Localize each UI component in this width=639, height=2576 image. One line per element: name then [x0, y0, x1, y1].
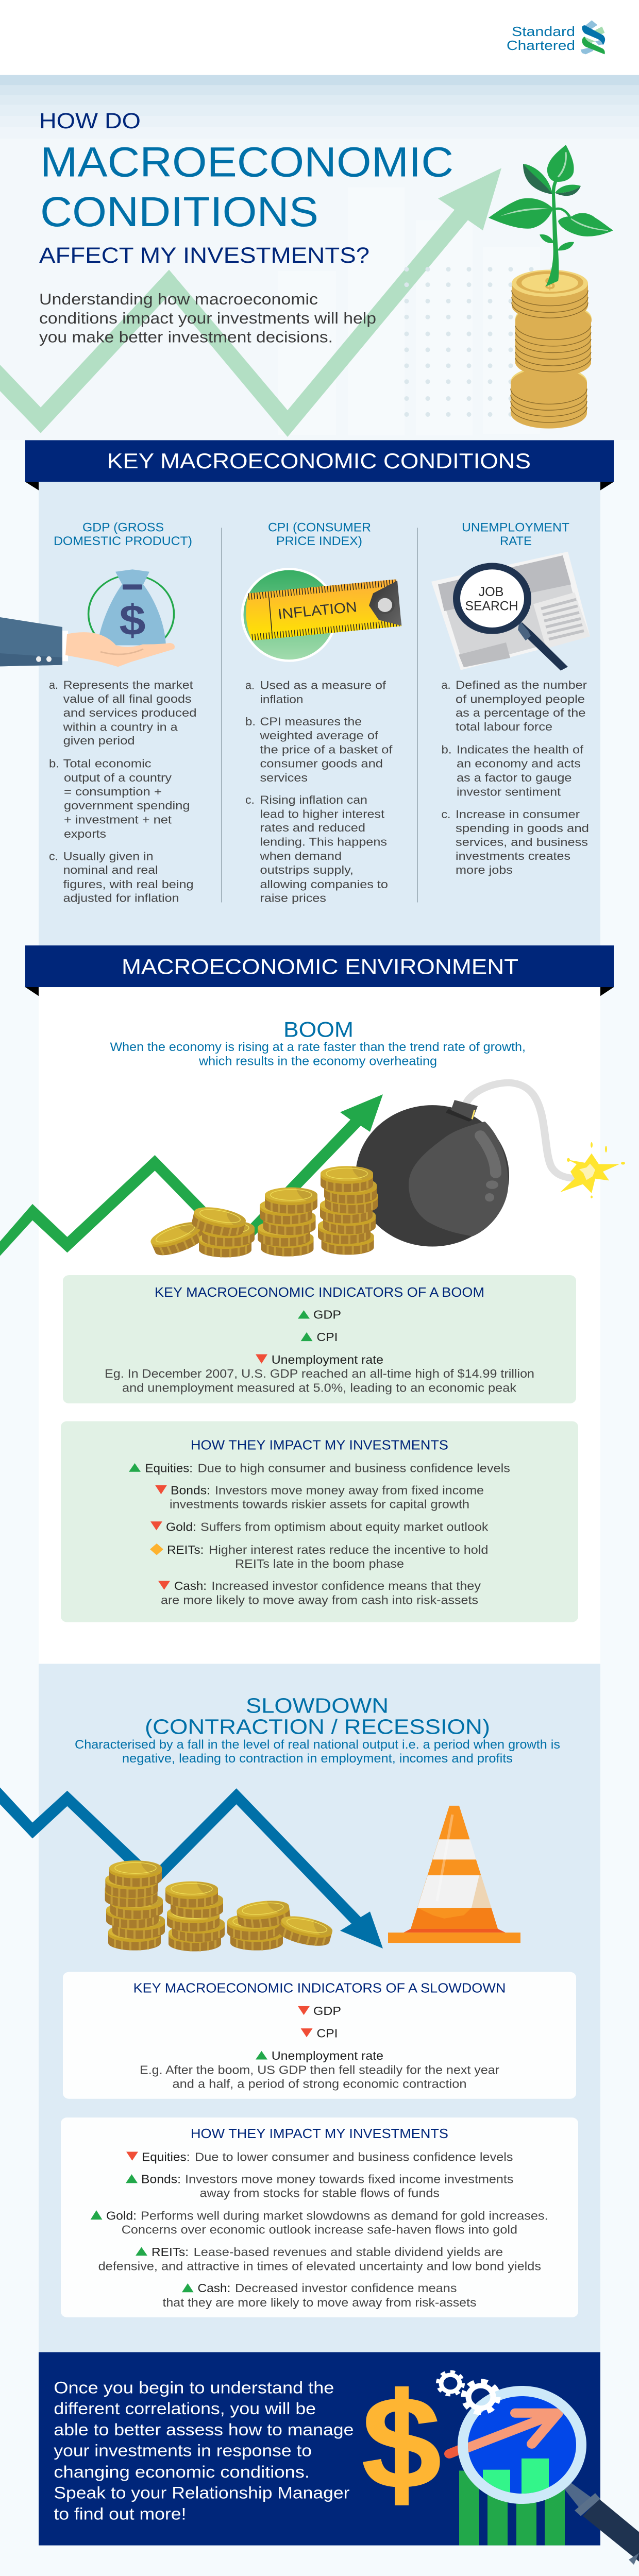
list: GDP points: Usually given in — [63, 850, 154, 862]
logo: Standard Chartered — [507, 20, 605, 54]
item: bonds: Bonds: — [141, 2173, 181, 2186]
item: cash: Increased investor confidence means that they — [211, 1580, 481, 1593]
icon: money bag in hand — [0, 569, 175, 667]
list: GDP points: government spending — [64, 799, 190, 812]
heading: GDP: DOMESTIC PRODUCT) — [54, 535, 192, 548]
heading: slowdown: (CONTRACTION / RECESSION) — [145, 1716, 490, 1739]
indicator: unemployment up: Unemployment rate — [272, 2049, 383, 2063]
text: boom description: When the economy is rising at a rate faster than the trend rate of growth, — [110, 1041, 526, 1054]
intro paragraph: Understanding how macroeconomic — [39, 290, 318, 308]
sprout leaves — [489, 145, 613, 250]
text: closing message: able to better assess how to manage — [54, 2420, 354, 2439]
title: CONDITIONS — [40, 189, 318, 235]
text: closing message: different correlations, you will be — [54, 2399, 316, 2418]
icon: job search magnifier on newspaper: SEARCH — [465, 599, 518, 613]
icon: inflation tape measure — [242, 569, 401, 660]
indicator: GDP down — [298, 2005, 341, 2018]
text: slowdown description: Characterised by a fall in the level of real national output i.e. a period when growth is — [75, 1738, 560, 1752]
list: CPI points: inflation — [260, 693, 304, 706]
text: boom example: and unemployment measured at 5.0%, leading to an economic peak — [122, 1381, 516, 1395]
logo wordmark: Standard — [512, 24, 575, 39]
list: unemployment points: spending in goods and — [456, 822, 589, 835]
list: GDP points: figures, with real being — [63, 878, 194, 891]
list: unemployment points: total labour force — [456, 720, 552, 733]
list: CPI points: lead to higher interest — [260, 807, 385, 820]
panel: how boom impacts investments — [61, 1421, 578, 1622]
text: boom description: which results in the economy overheating — [198, 1055, 437, 1068]
item: bonds: away from stocks for stable flows of funds — [200, 2187, 440, 2200]
lens chart — [468, 2408, 563, 2494]
item: bonds: Investors move money towards fixed income investments — [185, 2173, 514, 2186]
title: HOW DO — [39, 108, 141, 133]
list: unemployment points: c. — [441, 808, 451, 821]
heading: boom: BOOM — [283, 1018, 354, 1042]
item: REITs — [150, 1544, 488, 1571]
heading: GDP: GDP (GROSS — [82, 521, 164, 534]
arrow: red trend — [449, 2410, 558, 2454]
item: cash — [158, 1580, 481, 1607]
panel: how slowdown impacts investments — [61, 2117, 578, 2317]
arrow: blue slowdown chart line — [0, 1787, 383, 1948]
item: equities: Due to high consumer and business confidence levels — [198, 1462, 510, 1475]
text: slowdown example: E.g. After the boom, US GDP then fell steadily for the next year — [140, 2063, 499, 2077]
list: CPI points: b. — [245, 715, 256, 728]
list: GDP points: + investment + net — [64, 814, 172, 826]
panel: slowdown background — [39, 1664, 600, 2352]
panel: key macroeconomic conditions — [39, 482, 600, 945]
list: CPI points: rates and reduced — [260, 821, 365, 834]
text: closing message: to find out more! — [54, 2505, 186, 2523]
list: CPI points — [245, 679, 393, 904]
indicator: GDP up — [298, 1309, 341, 1321]
icon: bomb — [356, 1082, 577, 1247]
icon: inflation tape measure: INFLATION — [277, 599, 358, 622]
item: equities: Equities: — [142, 2151, 190, 2164]
list: GDP points: exports — [64, 827, 106, 840]
item: gold: Concerns over economic outlook increase safe-haven flows into gold — [122, 2224, 517, 2236]
item: bonds: investments towards riskier assets for capital growth — [170, 1498, 469, 1511]
item: REITs — [98, 2246, 541, 2273]
upper coin stack — [512, 270, 588, 321]
heading: unemployment rate: RATE — [500, 535, 532, 548]
item: cash: Cash: — [198, 2282, 231, 2295]
icon: spark — [560, 1142, 625, 1198]
text: closing message: changing economic conditions. — [54, 2463, 310, 2482]
indicator: CPI down — [301, 2027, 338, 2040]
column dividers — [222, 528, 417, 902]
item: gold — [91, 2209, 548, 2236]
list: unemployment points: as a factor to gauge — [457, 771, 572, 784]
banner: macroeconomic environment — [25, 945, 614, 996]
list: CPI points: when demand — [259, 850, 342, 862]
intro paragraph — [39, 290, 376, 346]
icon: dollar sign: $ — [361, 2369, 442, 2517]
item: gold: Gold: — [106, 2209, 137, 2223]
header white strip — [0, 0, 639, 75]
arrow: pale green rising zigzag — [0, 168, 501, 437]
heading: CPI: PRICE INDEX) — [276, 535, 362, 548]
list: GDP points: c. — [49, 850, 58, 862]
text: boom example: Eg. In December 2007, U.S. GDP reached an all-time high of $14.99 trillion — [105, 1367, 534, 1381]
item: bonds: Investors move money away from fixed income — [215, 1484, 484, 1497]
heading: slowdown — [145, 1694, 490, 1739]
heading: CPI — [268, 521, 371, 548]
icon: coin stack with sprout — [489, 145, 613, 429]
icon: magnifying glass — [448, 2386, 639, 2565]
column: GDP — [0, 521, 197, 904]
middle coin stack — [515, 303, 592, 377]
heading: CPI: CPI (CONSUMER — [268, 521, 371, 534]
item: gold: Performs well during market slowdowns as demand for gold increases. — [141, 2209, 548, 2223]
list: CPI points: raise prices — [260, 892, 326, 904]
icon: money bag in hand: $ — [119, 596, 146, 645]
lower coin stack — [511, 366, 587, 429]
logo wordmark: Chartered — [507, 38, 575, 53]
item: bonds: Bonds: — [171, 1484, 210, 1497]
list: CPI points: the price of a basket of — [260, 743, 393, 756]
icon: traffic cone — [388, 1806, 520, 1943]
item: cash: are more likely to move away from cash into risk-assets — [161, 1594, 478, 1607]
title — [39, 108, 453, 267]
indicator: unemployment down: Unemployment rate — [272, 1353, 383, 1366]
text: boom description — [110, 1041, 526, 1068]
list: GDP points: given period — [63, 734, 135, 747]
indicator: CPI up — [301, 1331, 338, 1344]
indicator: CPI down: CPI — [316, 2027, 338, 2040]
item: cash — [163, 2282, 477, 2310]
banner: key macroeconomic conditions: KEY MACROECONOMIC CONDITIONS — [107, 449, 531, 473]
list: unemployment points: Defined as the number — [456, 679, 587, 691]
list: unemployment points: more jobs — [456, 863, 513, 876]
heading: indicators: KEY MACROECONOMIC INDICATORS OF A BOOM — [155, 1284, 484, 1300]
text: closing message: Speak to your Relationship Manager — [54, 2484, 349, 2502]
item: REITs: Lease-based revenues and stable dividend yields are — [194, 2246, 503, 2259]
heading: slowdown: SLOWDOWN — [246, 1694, 389, 1718]
icon: gears — [438, 2372, 498, 2412]
item: gold: Suffers from optimism about equity market outlook — [200, 1520, 488, 1534]
list: unemployment points: b. — [441, 743, 451, 756]
text: closing message: Once you begin to understand the — [54, 2379, 334, 2397]
heading: impact: HOW THEY IMPACT MY INVESTMENTS — [191, 1437, 448, 1452]
icon: coin stacks (boom) — [148, 1166, 378, 1260]
heading: slowdown impact: HOW THEY IMPACT MY INVESTMENTS — [191, 2126, 448, 2141]
list: CPI points: Rising inflation can — [260, 793, 367, 806]
item: REITs: defensive, and attractive in times of elevated uncertainty and low bond yields — [98, 2260, 541, 2273]
item: gold: Gold: — [166, 1520, 196, 1534]
list: unemployment points: as a percentage of the — [456, 706, 586, 719]
list: GDP points: adjusted for inflation — [63, 892, 179, 904]
item: REITs: REITs: — [152, 2246, 189, 2259]
heading: slowdown indicators: KEY MACROECONOMIC INDICATORS OF A SLOWDOWN — [133, 1980, 506, 1995]
heading: unemployment rate: UNEMPLOYMENT — [462, 521, 569, 534]
banner: key macroeconomic conditions — [25, 440, 614, 490]
list: GDP points: value of all final goods — [63, 692, 192, 705]
item: REITs: REITs late in the boom phase — [235, 1557, 404, 1571]
icon: coin stacks (slowdown) — [105, 1860, 334, 1951]
text: boom example — [105, 1367, 534, 1395]
list: unemployment points: a. — [441, 679, 451, 691]
column: unemployment rate — [431, 521, 590, 876]
panel: key indicators of a boom — [63, 1275, 576, 1403]
list: GDP points — [49, 679, 197, 904]
list: GDP points: nominal and real — [63, 863, 158, 876]
list: GDP points: a. — [49, 679, 58, 691]
panel: boom background — [39, 987, 600, 1664]
text: slowdown description: negative, leading to contraction in employment, incomes and profits — [122, 1752, 513, 1766]
icon: job search magnifier on newspaper — [431, 552, 590, 671]
text: slowdown description — [75, 1738, 560, 1766]
intro paragraph: conditions impact your investments will help — [39, 309, 376, 327]
title: MACROECONOMIC — [40, 139, 453, 186]
list: unemployment points: investor sentiment — [457, 785, 561, 798]
list: GDP points: Represents the market — [63, 679, 193, 691]
list: CPI points: allowing companies to — [260, 878, 388, 891]
item: equities: Due to lower consumer and business confidence levels — [195, 2151, 513, 2164]
text: slowdown example — [140, 2063, 499, 2091]
list: unemployment points: Indicates the health of — [457, 743, 584, 756]
text: closing message: your investments in response to — [54, 2442, 312, 2460]
item: REITs: Higher interest rates reduce the incentive to hold — [209, 1544, 488, 1557]
list: unemployment points: Increase in consumer — [456, 808, 580, 821]
list: unemployment points: an economy and acts — [457, 757, 581, 770]
text: slowdown example: and a half, a period of strong economic contraction — [172, 2078, 467, 2091]
sprout stem — [546, 181, 559, 286]
list: unemployment points: investments creates — [456, 850, 570, 862]
item: equities: Equities: — [145, 1462, 193, 1475]
item: cash: Cash: — [174, 1580, 207, 1593]
list: unemployment points: services, and business — [456, 836, 588, 849]
list: GDP points: output of a country — [64, 771, 172, 784]
list: CPI points: consumer goods and — [260, 757, 383, 770]
list: CPI points: weighted average of — [259, 729, 379, 742]
list: GDP points: = consumption + — [64, 785, 162, 798]
logo mark — [581, 20, 605, 54]
item: REITs: REITs: — [167, 1544, 204, 1557]
icon: job search magnifier on newspaper: JOB — [478, 585, 504, 599]
item: bonds — [126, 2173, 514, 2200]
list: CPI points: a. — [245, 679, 255, 691]
list: unemployment points — [441, 679, 589, 876]
indicator: CPI up: CPI — [316, 1331, 338, 1344]
heading: GDP — [54, 521, 192, 548]
indicator: GDP up: GDP — [313, 1309, 341, 1321]
heading: unemployment rate — [462, 521, 569, 548]
title: AFFECT MY INVESTMENTS? — [39, 243, 369, 267]
upper coin stack: $ — [545, 274, 555, 293]
arrow: green boom chart line — [0, 1094, 383, 1256]
hero gradient bands — [0, 75, 639, 440]
banner: macroeconomic environment: MACROECONOMIC ENVIRONMENT — [122, 955, 518, 979]
list: GDP points: b. — [49, 757, 59, 770]
list: CPI points: outstrips supply, — [260, 863, 354, 876]
intro paragraph: you make better investment decisions. — [39, 328, 333, 346]
column: CPI — [242, 521, 401, 904]
item: bonds — [155, 1484, 484, 1511]
text: closing message — [54, 2379, 354, 2523]
list: CPI points: CPI measures the — [260, 715, 362, 728]
list: CPI points: c. — [245, 793, 255, 806]
list: unemployment points: of unemployed people — [456, 692, 585, 705]
item: cash: Decreased investor confidence means — [235, 2282, 457, 2295]
list: GDP points: within a country in a — [63, 720, 178, 733]
panel: key indicators of a slowdown — [63, 1972, 576, 2099]
list: CPI points: lending. This happens — [260, 836, 387, 848]
dot grid — [404, 267, 554, 417]
logo wordmark — [507, 24, 575, 53]
panel: closing call to action — [39, 2352, 600, 2546]
list: GDP points: Total economic — [63, 757, 152, 770]
list: CPI points: Used as a measure of — [260, 679, 386, 691]
item: cash: that they are more likely to move away from risk-assets — [163, 2296, 477, 2310]
indicator: GDP down: GDP — [313, 2005, 341, 2018]
chart: green bars — [459, 2470, 565, 2546]
list: CPI points: services — [260, 771, 308, 784]
list: GDP points: and services produced — [63, 706, 197, 719]
